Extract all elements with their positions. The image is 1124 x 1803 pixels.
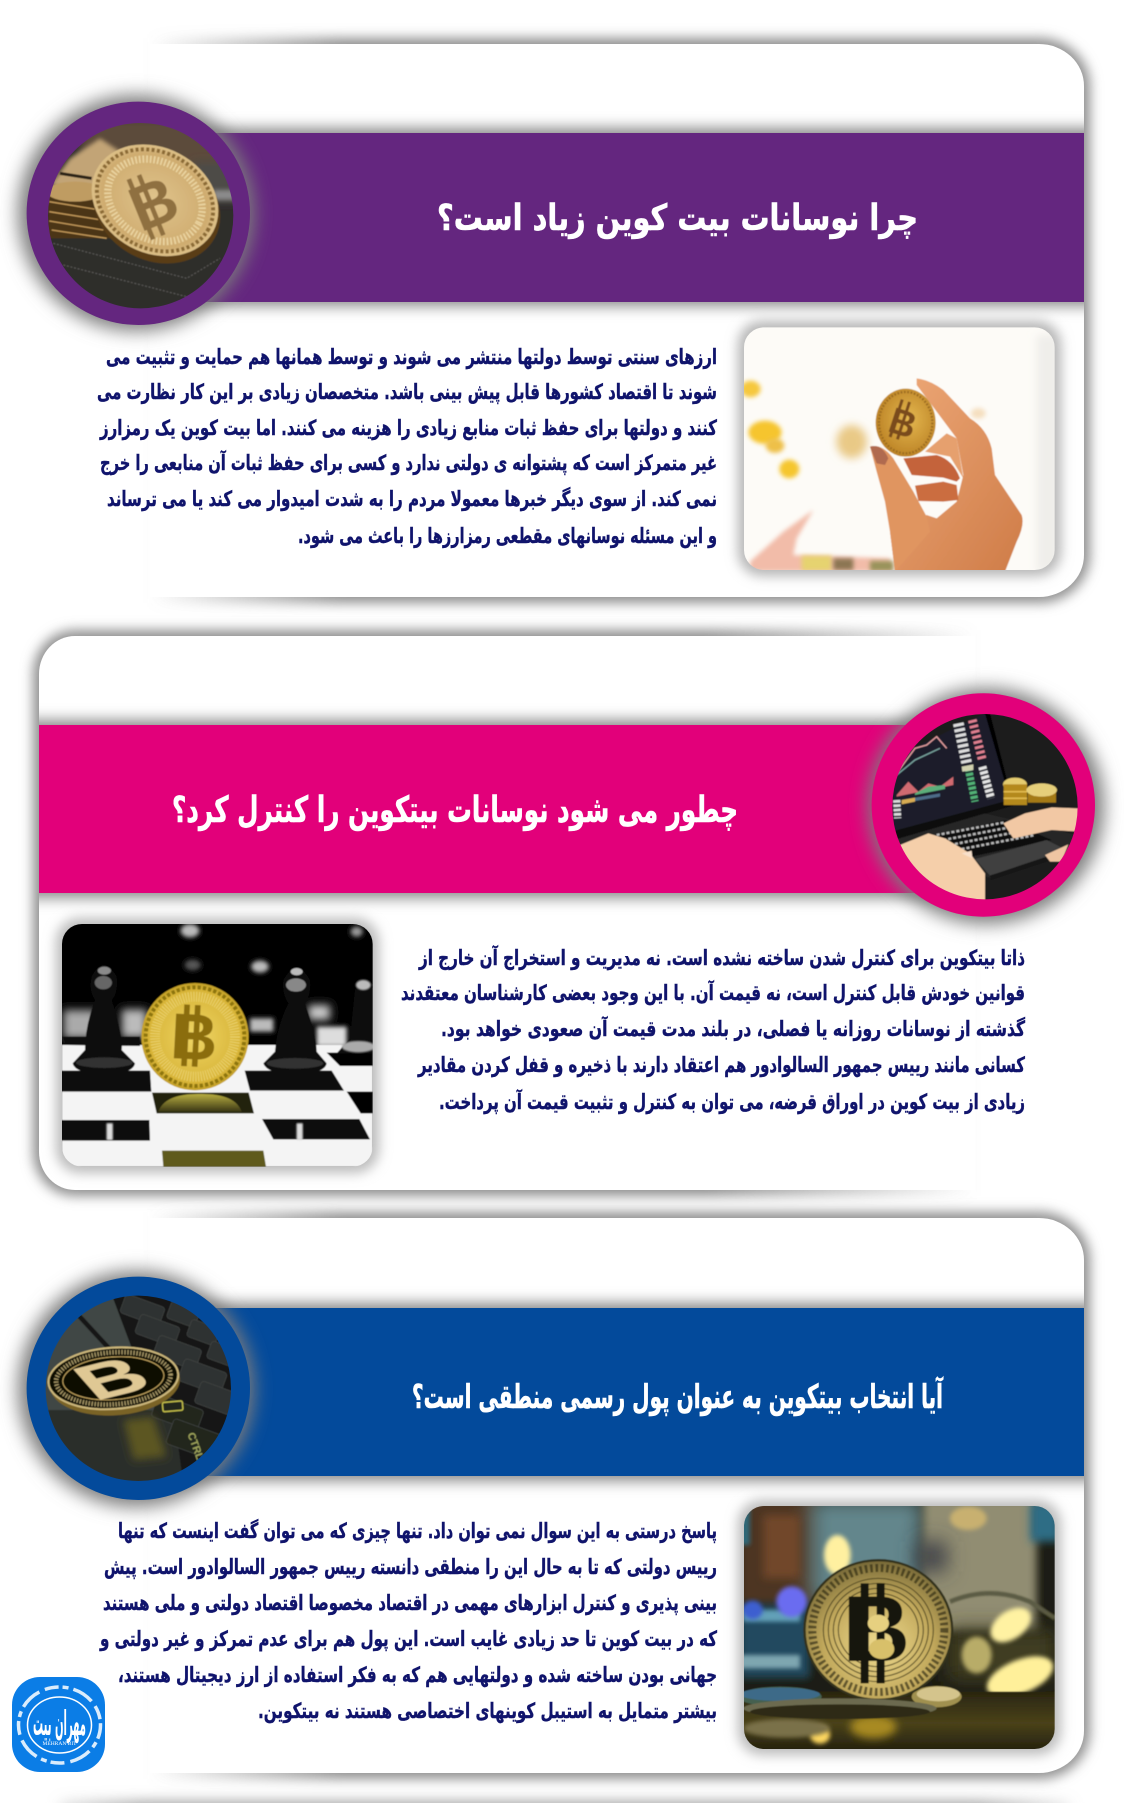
body text 1: کنند و دولتها برای حفظ ثبات منابع زیادی را هزینه می کنند. اما بیت کوین یک رمزارز [99,416,718,440]
circular photo: bitcoin on a keyboard [18,1271,254,1507]
purple heading band [150,128,1100,306]
circular photo: trading laptop with coins [868,688,1104,924]
body text 3 [99,1518,718,1723]
body text 3: بینی پذیری و کنترل ابزارهای مهمی در اقتصاد مخصوصا اقتصاد دولتی و ملی هستند [103,1591,717,1615]
photo: hand holding a bitcoin: B [884,399,922,447]
heading 1: چرا نوسانات بیت کوین زیاد است؟ [437,198,918,239]
body text 1: غیر متمرکز است که پشتوانه ی دولتی ندارد و کسی برای حفظ ثبات آن منابعی را خرج [100,450,717,476]
logo: Mehran Bit [12,1677,105,1772]
card 3 background [150,1212,1090,1779]
body text 1 [97,345,718,548]
photo: hand holding a bitcoin [738,321,1061,576]
body text 3: بیشتر متمایل به استیبل کوینهای اختصاصی هستند نه بیتکوین. [258,1699,717,1723]
photo: bitcoin on a chessboard: B [169,999,219,1074]
body text 2 [401,945,1026,1114]
body text 3: رییس دولتی که تا به حال این را منطقی دانسته رییس جمهور السالوادور است. پیش [104,1555,717,1579]
circular photo: bitcoin on a keyboard: B [59,1346,164,1411]
body text 1: ارزهای سنتی توسط دولتها منتشر می شوند و توسط همانها هم حمایت و تثبیت می [106,345,717,369]
body text 1: و این مسئله نوسانهای مقطعی رمزارزها را باعث می شود. [298,524,717,548]
card 2 background [33,630,975,1196]
body text 1: نمی کند. از سوی دیگر خبرها معمولا مردم را به شدت امیدوار می کند یا می ترساند [107,486,717,511]
panel: why bitcoin volatility is high [18,38,1100,603]
body text 3: پاسخ درستی به این سوال نمی توان داد. تنها چیزی که می توان گفت اینست که تنها [118,1518,717,1543]
logo: Mehran Bit: MEHRAN BIT [42,1741,77,1747]
heading 2: چطور می شود نوسانات بیتکوین را کنترل کرد؟ [172,790,738,831]
shadow of next section at page bottom [60,1802,1070,1803]
panel: is bitcoin logical as legal tender [18,1212,1100,1779]
body text 1: شوند تا اقتصاد کشورها قابل پیش بینی باشد. متخصصان زیادی بر این کار نظارت می [97,380,717,404]
photo: gold bitcoin with bokeh lights [737,1498,1061,1755]
pink heading band [20,720,970,898]
body text 3: که در بیت کوین تا حد زیادی غایب است. این پول هم برای عدم تمرکز و غیر دولتی و [99,1627,718,1651]
card 1 background [150,38,1090,603]
blue heading band [150,1303,1100,1481]
logo: Mehran Bit: مهران بیت [33,1703,86,1744]
photo: bitcoin on a chessboard [56,918,379,1173]
body text 3: جهانی بودن ساخته شده و دولتهایی هم که به فکر استفاده از ارز دیجیتال هستند، [118,1663,717,1687]
circular photo: stacked gold bitcoins: B [120,163,188,246]
circular photo: bitcoin on a keyboard: CTRL [185,1431,206,1462]
panel: how to control bitcoin volatility [20,630,1104,1196]
circular photo: stacked gold bitcoins [18,95,254,331]
photo: gold bitcoin with bokeh lights: B [843,1577,910,1681]
